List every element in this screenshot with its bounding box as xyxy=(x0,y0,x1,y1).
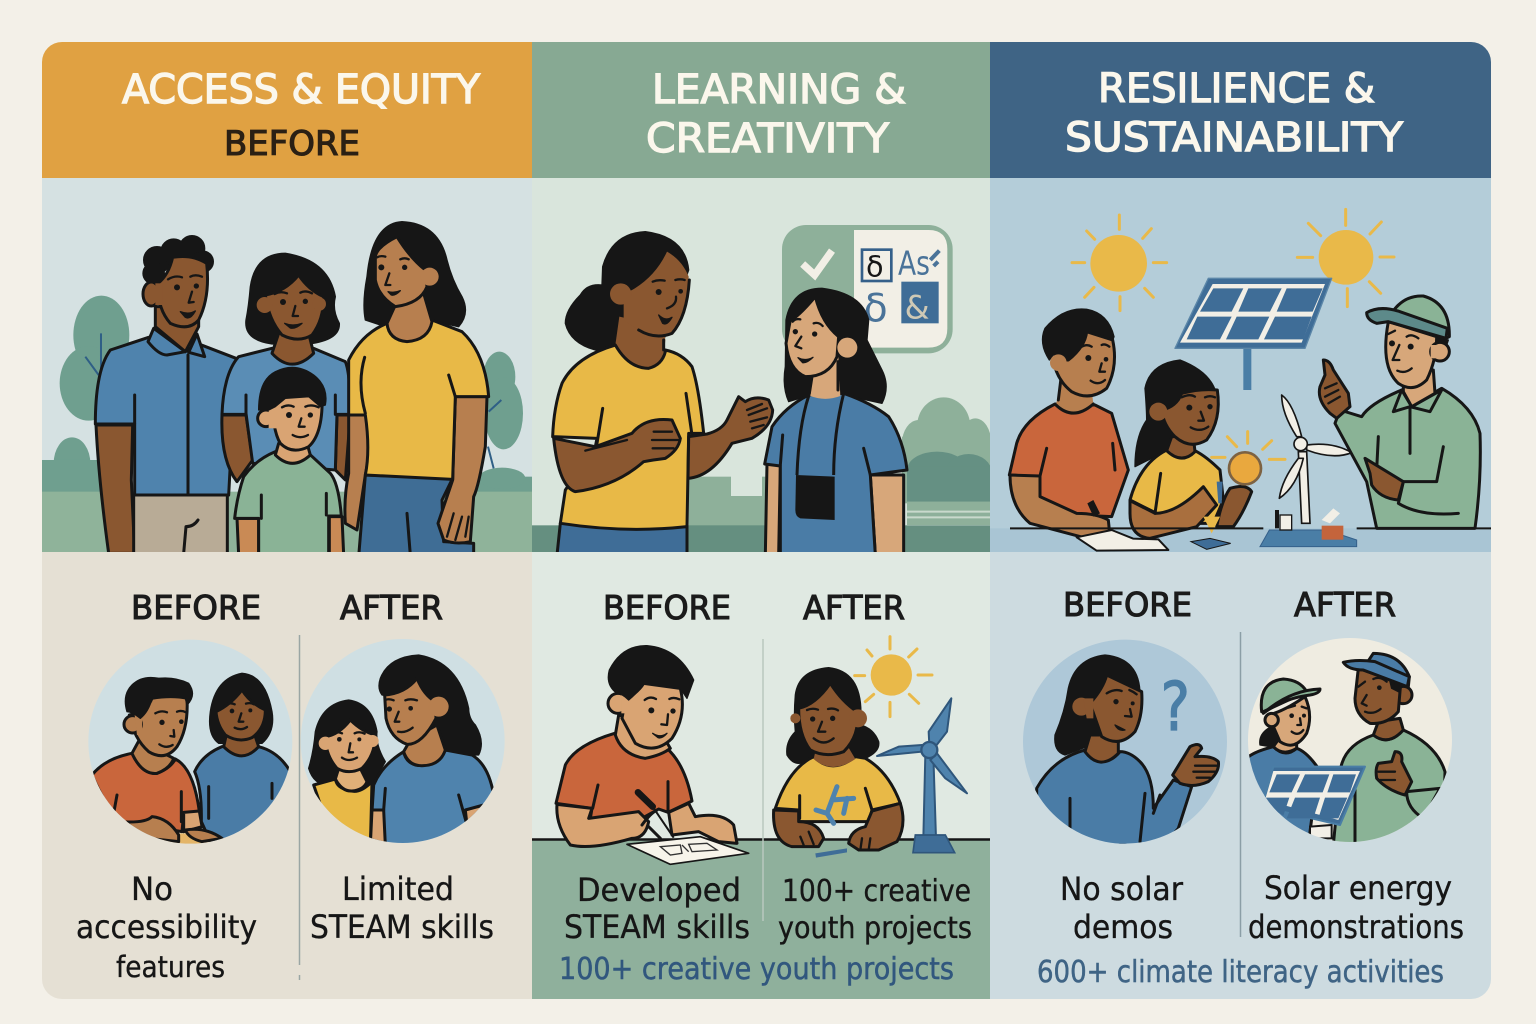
illustration: before, two children without access xyxy=(88,640,292,847)
text: after, solar energy demonstrations: Solar energy xyxy=(1264,869,1452,907)
figure: woman gesturing in yellow shirt xyxy=(553,232,773,555)
icon: accessibility checklist badge xyxy=(782,225,953,353)
key stat: climate literacy activities: 600+ climate literacy activities xyxy=(1037,955,1444,990)
text: before, no accessibility features xyxy=(78,876,256,978)
text: after, creative youth projects: 100+ creative xyxy=(782,874,971,909)
text: before, developed steam skills xyxy=(566,876,749,939)
illustration: before, boy sketching at a table xyxy=(556,646,749,864)
text: before, no accessibility features: No xyxy=(131,870,173,908)
illustration: after, two people with solar panel xyxy=(1247,638,1452,845)
figure: girl holding a light bulb xyxy=(1130,360,1285,549)
panel: learning and creativity xyxy=(532,42,992,999)
icon: wind turbine model xyxy=(1260,395,1357,547)
heading: before: BEFORE xyxy=(1063,585,1192,624)
header: learning and creativity xyxy=(532,42,990,178)
heading: after: AFTER xyxy=(1294,585,1396,624)
text: after, solar energy demonstrations: demonstrations xyxy=(1248,908,1464,946)
icon: left sun xyxy=(1072,215,1167,311)
figure: boy writing in orange shirt xyxy=(1009,309,1128,538)
header: access and equity: BEFORE xyxy=(224,124,360,164)
figure: girl in blue shirt and scarf xyxy=(765,288,907,555)
panel: before and after comparison, learning xyxy=(532,552,990,999)
text: before, no accessibility features: accessibility xyxy=(76,908,257,946)
text: after, solar energy demonstrations xyxy=(1248,869,1464,946)
text: before, no solar demos: demos xyxy=(1073,908,1173,946)
header: resilience and sustainability xyxy=(990,42,1491,178)
text: before, no solar demos: No solar xyxy=(1060,870,1184,908)
heading: after: AFTER xyxy=(803,588,905,627)
header: access and equity: ACCESS & EQUITY xyxy=(122,67,481,113)
icon: right sun xyxy=(1297,209,1394,307)
heading: before: BEFORE xyxy=(603,588,731,627)
text: after, creative youth projects: youth projects xyxy=(778,911,972,946)
figure: man in blue shirt xyxy=(95,236,236,555)
panel: resilience and sustainability xyxy=(990,42,1491,999)
icon: accessibility checklist badge: δ xyxy=(866,250,884,284)
text: before, no accessibility features: features xyxy=(116,950,225,984)
header: resilience and sustainability: RESILIENCE & xyxy=(1098,66,1375,112)
text: after, limited steam skills xyxy=(312,875,493,939)
icon: accessibility checklist badge: & xyxy=(905,289,930,327)
heading: after: AFTER xyxy=(340,588,443,627)
illustration: after, girl and woman together xyxy=(301,639,505,848)
text: after, limited steam skills: STEAM skills xyxy=(310,908,494,946)
text: after, limited steam skills: Limited xyxy=(342,870,454,908)
text: before, no solar demos xyxy=(1060,870,1184,946)
illustration: family of four in a park xyxy=(42,178,532,557)
illustration: two people talking xyxy=(532,178,992,555)
header: access and equity xyxy=(42,42,532,178)
header: resilience and sustainability: SUSTAINABILITY xyxy=(1065,115,1404,161)
heading: before: BEFORE xyxy=(131,588,261,627)
illustration: before, woman with a question: ? xyxy=(1161,668,1190,746)
figure: woman in light blue shirt xyxy=(222,253,350,482)
figure: instructor in green cap and shirt xyxy=(1319,296,1480,528)
text: before, developed steam skills: STEAM skills xyxy=(564,908,750,946)
text: after, creative youth projects xyxy=(778,874,972,946)
key stat: creative youth projects: 100+ creative youth projects xyxy=(559,952,954,987)
figure: boy in green shirt xyxy=(235,367,344,555)
panel: before and after comparison, resilience xyxy=(990,552,1491,999)
illustration: solar and wind workshop xyxy=(990,178,1491,555)
illustration: after, girl with turbine model xyxy=(774,637,967,858)
header: learning and creativity: LEARNING & xyxy=(652,67,906,113)
header: learning and creativity: CREATIVITY xyxy=(646,116,890,162)
illustration: before, woman with a question xyxy=(1023,640,1227,845)
panel: access and equity xyxy=(42,42,532,999)
icon: accessibility checklist badge: δ xyxy=(864,285,888,331)
table and notebook xyxy=(1010,528,1491,551)
panel: before and after comparison, access xyxy=(42,552,532,999)
text: before, developed steam skills: Developed xyxy=(577,871,741,909)
icon: accessibility checklist badge: As xyxy=(898,244,930,283)
figure: tall woman in yellow shirt xyxy=(345,222,489,557)
icon: solar panel xyxy=(1175,278,1332,390)
